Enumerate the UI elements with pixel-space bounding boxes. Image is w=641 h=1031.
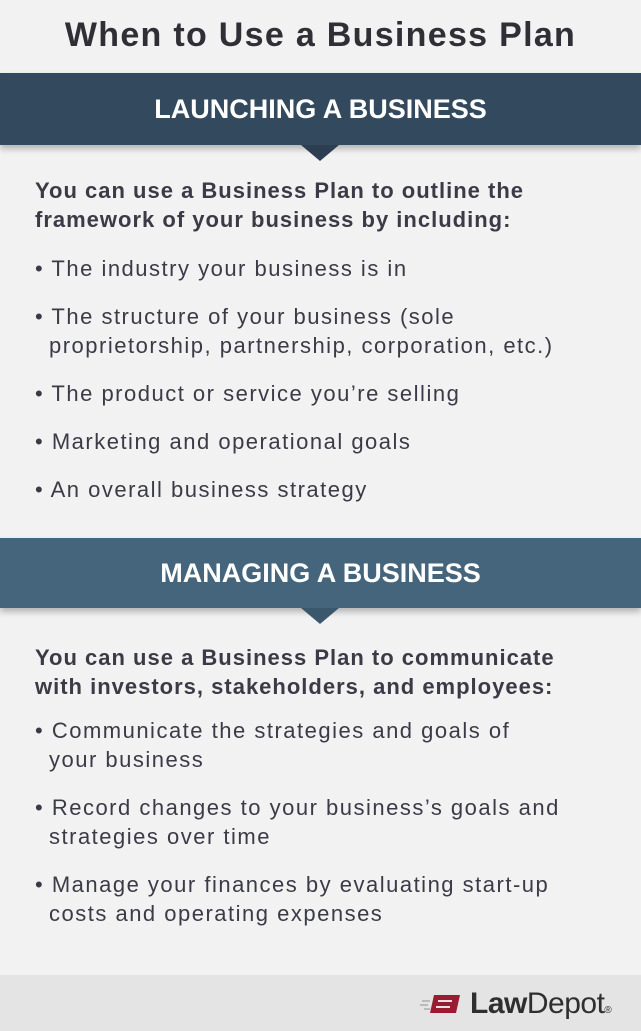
list: managing: • Manage your finances by evaluating start-up — [35, 872, 549, 897]
list: launching: • An overall business strategy — [35, 477, 368, 502]
list: launching: proprietorship, partnership, corporation, etc.) — [49, 333, 554, 358]
list: managing: your business — [49, 747, 204, 772]
list: launching: • The industry your business is in — [35, 256, 408, 281]
banner: managing — [0, 538, 641, 608]
list: launching: • The structure of your business (sole — [35, 304, 455, 329]
lead text: managing: You can use a Business Plan to communicate — [35, 645, 555, 670]
logo — [420, 987, 612, 1020]
list: managing: costs and operating expenses — [49, 901, 383, 926]
lead text: managing — [35, 645, 555, 699]
list: launching — [35, 256, 554, 502]
lead text: launching: You can use a Business Plan to outline the — [35, 178, 524, 203]
lead text: launching — [35, 178, 524, 232]
title: When to Use a Business Plan — [65, 16, 576, 54]
lead text: managing: with investors, stakeholders, and employees: — [35, 674, 553, 699]
footer — [0, 975, 641, 1031]
list: managing: • Record changes to your business’s goals and — [35, 795, 560, 820]
list: managing: • Communicate the strategies and goals of — [35, 718, 510, 743]
list: launching: • Marketing and operational goals — [35, 429, 411, 454]
icon: logo mark — [420, 995, 460, 1013]
lead text: launching: framework of your business by including: — [35, 207, 511, 232]
list: launching: • The product or service you’re selling — [35, 381, 460, 406]
list: managing: strategies over time — [49, 824, 271, 849]
logo text: LawDepot® — [470, 987, 611, 1020]
list: managing — [35, 718, 560, 926]
banner: launching: LAUNCHING A BUSINESS — [154, 94, 487, 124]
arrow: launching — [301, 145, 339, 161]
banner: managing: MANAGING A BUSINESS — [160, 558, 481, 588]
arrow: managing — [301, 608, 339, 624]
banner: launching — [0, 73, 641, 145]
